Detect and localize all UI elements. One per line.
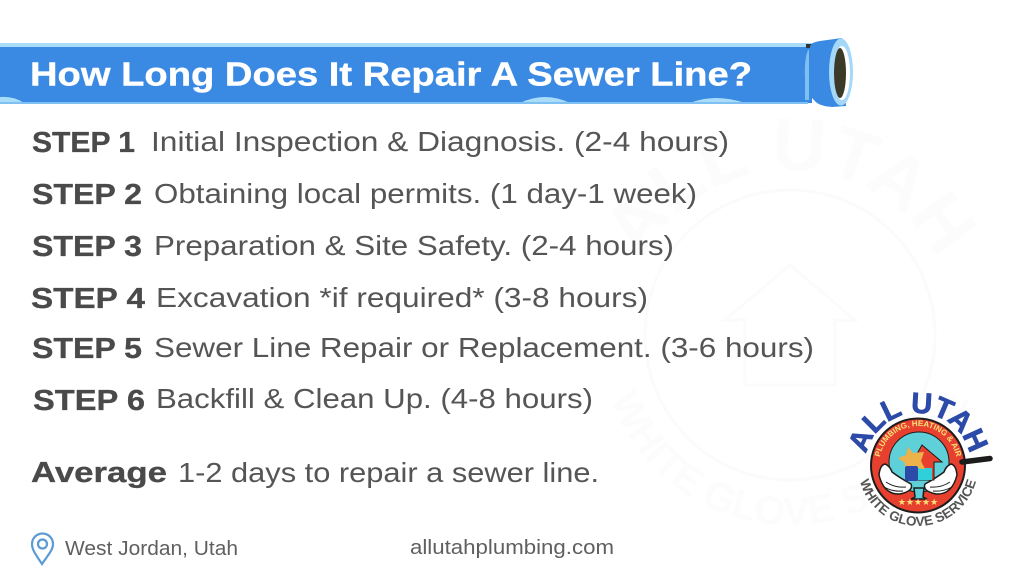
average [31, 457, 599, 489]
watermark: faint logo: WHITE GLOVE SERVICE [602, 384, 978, 534]
logo ring [871, 418, 965, 512]
step 4: Excavation *if required* (3-8 hours) [156, 282, 648, 313]
step 6 [33, 383, 593, 417]
watermark: faint logo [587, 102, 993, 534]
logo [850, 392, 993, 526]
watermark: faint logo: ALL UTAH [587, 102, 993, 269]
step 6: STEP 6 [33, 385, 145, 417]
logo stars: ★★★★★ [898, 497, 938, 507]
step 4: STEP 4 [31, 283, 145, 315]
step 3: Preparation & Site Safety. (2-4 hours) [154, 230, 674, 261]
step 1: STEP 1 [32, 127, 135, 159]
step 5: STEP 5 [32, 333, 142, 365]
step 1 [32, 126, 729, 159]
step 2: STEP 2 [32, 179, 142, 211]
icon: pipe end [805, 38, 853, 107]
step 3 [32, 230, 674, 263]
title banner: pipe [0, 38, 853, 107]
step 4 [31, 282, 648, 315]
average: 1-2 days to repair a sewer line. [178, 457, 599, 488]
logo hands [879, 464, 957, 499]
step 1: Initial Inspection & Diagnosis. (2-4 hours) [151, 126, 729, 157]
location: West Jordan, Utah [65, 538, 238, 560]
step 2: Obtaining local permits. (1 day-1 week) [154, 178, 697, 209]
logo house [898, 445, 942, 481]
icon: location pin [32, 534, 53, 564]
logo ring text: PLUMBING, HEATING & AIR [874, 420, 962, 457]
logo bottom text: WHITE GLOVE SERVICE [860, 478, 976, 526]
logo handle [962, 458, 990, 462]
step 2 [32, 178, 697, 211]
step 5: Sewer Line Repair or Replacement. (3-6 hours) [154, 332, 814, 363]
step 3: STEP 3 [32, 231, 142, 263]
logo top text: ALL UTAH [850, 392, 988, 454]
step 6: Backfill & Clean Up. (4-8 hours) [156, 383, 593, 414]
title: How Long Does It Repair A Sewer Line? [30, 56, 752, 92]
website: allutahplumbing.com [410, 537, 614, 559]
average: Average [31, 457, 167, 489]
